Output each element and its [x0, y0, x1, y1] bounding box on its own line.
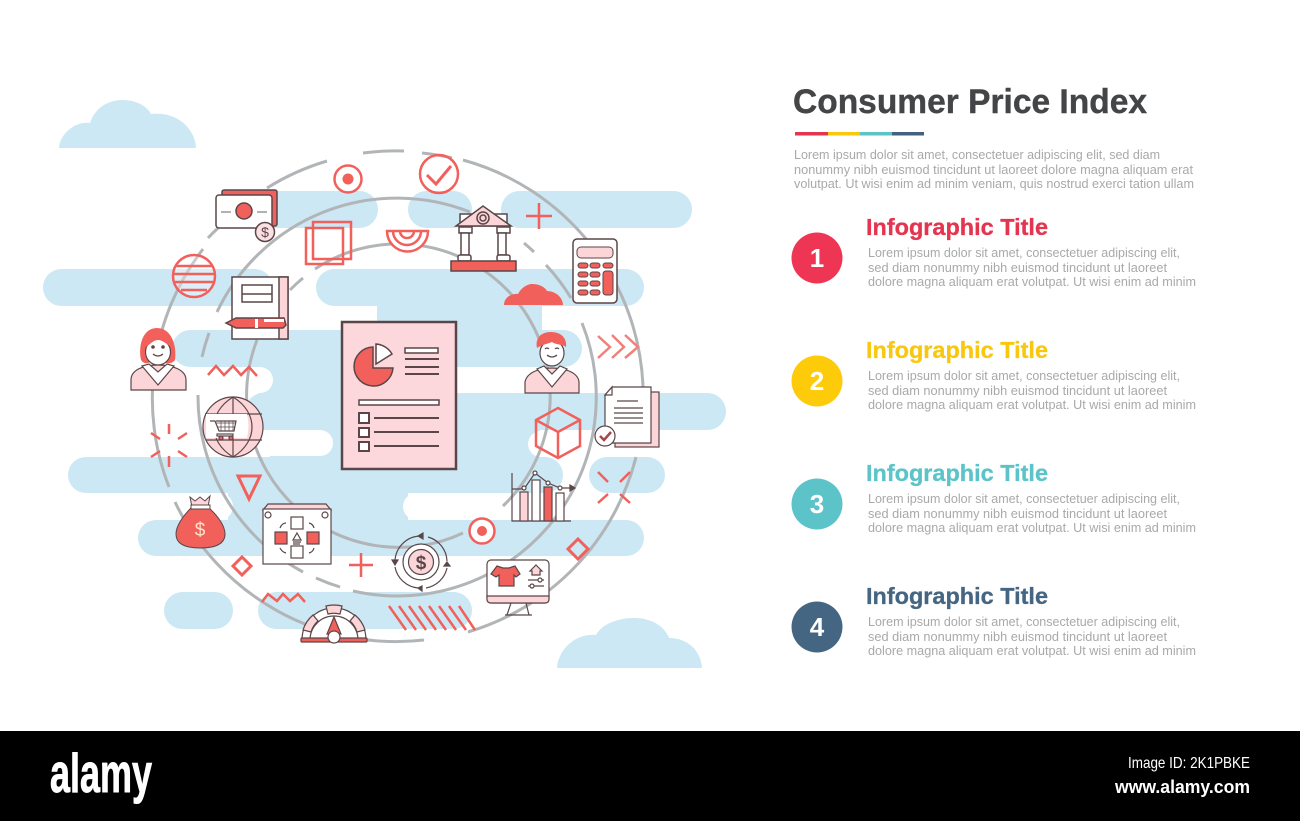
icon: workflow board	[263, 504, 331, 564]
title: Consumer Price Index	[793, 83, 1147, 121]
icon: dollar cycle	[392, 533, 450, 591]
icon: online store monitor	[487, 560, 549, 615]
icon: money bag: $	[195, 520, 206, 541]
footer band: alamy	[50, 742, 152, 804]
icon: red cloud	[504, 284, 563, 305]
number badge 2	[792, 356, 842, 406]
list item 1	[792, 214, 1196, 289]
list item 2: Lorem ipsum dolor sit amet, consectetuer adipiscing elit,	[868, 369, 1180, 383]
icon: banknote and coin: $	[261, 224, 269, 240]
icon: banknote and coin	[216, 190, 277, 242]
icon: dollar cycle: $	[416, 553, 427, 574]
icon: money bag	[176, 496, 225, 548]
list item 3	[792, 460, 1196, 535]
icon: man	[525, 332, 579, 393]
icon: calculator	[573, 239, 617, 303]
list item 1: Lorem ipsum dolor sit amet, consectetuer adipiscing elit,	[868, 246, 1180, 260]
pie chart	[354, 344, 393, 386]
title colour bar	[795, 132, 924, 136]
list item 4: Infographic Title	[866, 583, 1048, 609]
list item 1: dolore magna aliquam erat volutpat. Ut wisi enim ad minim	[868, 275, 1196, 289]
central document icon	[342, 322, 456, 469]
intro paragraph	[794, 148, 1194, 191]
footer band	[0, 731, 1300, 821]
list item 3: dolore magna aliquam erat volutpat. Ut wisi enim ad minim	[868, 521, 1196, 535]
footer band: Image ID: 2K1PBKE	[1128, 755, 1250, 772]
number badge 2: 2	[810, 366, 824, 396]
intro paragraph: Lorem ipsum dolor sit amet, consectetuer adipiscing elit, sed diam	[794, 148, 1160, 162]
list item 1: sed diam nonummy nibh euismod tincidunt ut laoreet	[868, 261, 1168, 275]
list item 2: Infographic Title	[866, 337, 1048, 363]
list item 4: dolore magna aliquam erat volutpat. Ut wisi enim ad minim	[868, 644, 1196, 658]
number badge 3: 3	[810, 489, 824, 519]
icon: bar and line chart	[512, 471, 575, 521]
icon: cube	[536, 408, 580, 458]
number badge 1	[792, 232, 842, 284]
list item 4: Lorem ipsum dolor sit amet, consectetuer adipiscing elit,	[868, 615, 1180, 629]
icon: striped circle	[173, 255, 215, 297]
concentric dashed rings	[152, 151, 643, 642]
list item 2: dolore magna aliquam erat volutpat. Ut wisi enim ad minim	[868, 398, 1196, 412]
number badge 3	[792, 478, 842, 530]
list item 3: Lorem ipsum dolor sit amet, consectetuer adipiscing elit,	[868, 492, 1180, 506]
icon: bank building	[451, 206, 516, 271]
icon: gauge	[301, 605, 367, 643]
icon: approved documents	[595, 387, 659, 447]
intro paragraph: nonummy nibh euismod tincidunt ut laoreet dolore magna aliquam erat	[794, 163, 1194, 177]
icon: woman	[131, 328, 186, 390]
list item 4	[792, 583, 1196, 658]
decorative red marks	[151, 155, 638, 630]
list item 3: Infographic Title	[866, 460, 1048, 486]
list item 1: Infographic Title	[866, 214, 1048, 240]
icon: notebook and pen	[226, 277, 288, 339]
intro paragraph: volutpat. Ut wisi enim ad minim veniam, quis nostrud exerci tation ullam	[794, 177, 1194, 191]
number badge 1: 1	[810, 243, 824, 273]
number badge 4: 4	[810, 612, 825, 642]
list item 4: sed diam nonummy nibh euismod tincidunt ut laoreet	[868, 630, 1168, 644]
icon: globe with shopping cart	[203, 397, 263, 457]
footer band: www.alamy.com	[1114, 777, 1250, 797]
number badge 4	[792, 602, 842, 652]
list item 2: sed diam nonummy nibh euismod tincidunt ut laoreet	[868, 384, 1168, 398]
background clouds and pills	[43, 100, 726, 668]
list item 2	[792, 337, 1196, 412]
list item 3: sed diam nonummy nibh euismod tincidunt ut laoreet	[868, 507, 1168, 521]
